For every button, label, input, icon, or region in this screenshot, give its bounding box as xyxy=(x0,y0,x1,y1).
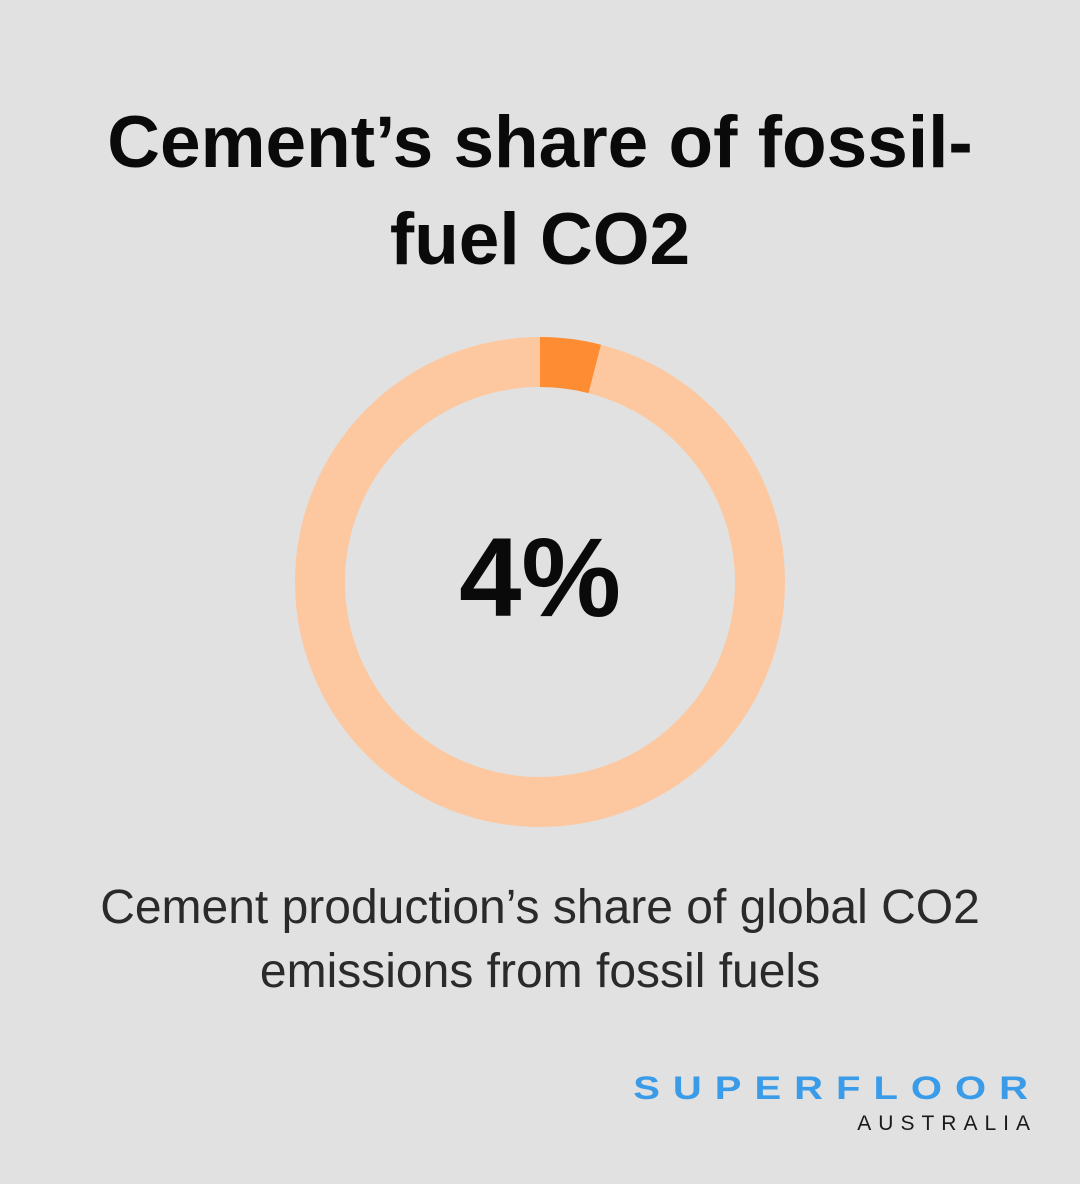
title: Cement’s share of fossil- xyxy=(107,102,973,183)
description: emissions from fossil fuels xyxy=(260,945,820,998)
logo xyxy=(633,1070,1041,1135)
logo: AUSTRALIA xyxy=(857,1112,1037,1135)
title xyxy=(107,102,973,280)
description: Cement production’s share of global CO2 xyxy=(100,881,980,934)
percentage value: 4% xyxy=(459,515,621,640)
description xyxy=(100,881,980,998)
title: fuel CO2 xyxy=(390,199,690,280)
logo: SUPERFLOOR xyxy=(633,1070,1041,1106)
